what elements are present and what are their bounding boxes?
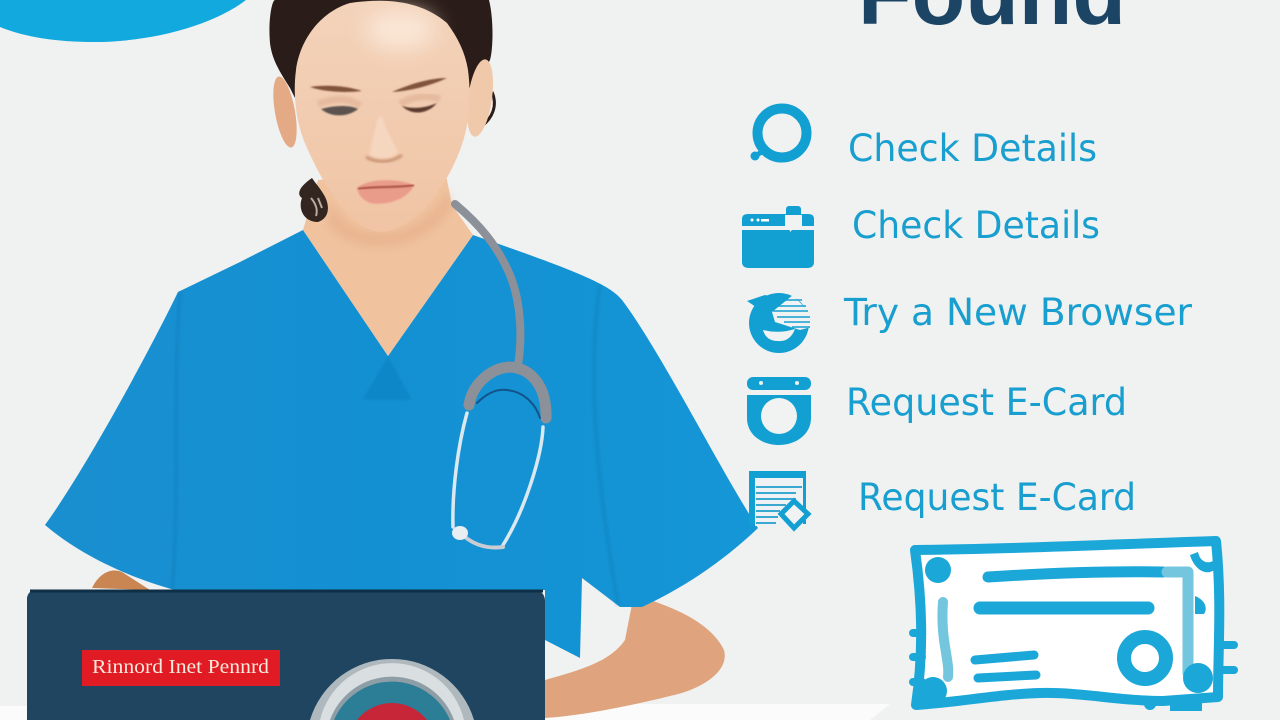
icon: card with ring <box>747 377 811 445</box>
eyelid shading <box>318 97 440 106</box>
scrubs <box>45 230 758 658</box>
item 4: request e-card: Request E-Card <box>846 381 1127 424</box>
nurse figure <box>45 0 758 718</box>
decorative cyan blob top left <box>0 0 246 42</box>
red error label: Rinnord Inet Pennrd <box>92 656 269 678</box>
laptop round logo <box>310 659 474 720</box>
e-card illustration <box>913 541 1234 711</box>
text lines <box>988 572 1163 577</box>
red error label <box>82 650 280 686</box>
icon: magnifier ring <box>750 108 806 160</box>
forehead highlight <box>365 10 435 50</box>
eyebrows <box>310 78 447 92</box>
checklist <box>742 108 1193 528</box>
hair back <box>269 0 492 100</box>
eyes <box>321 106 358 115</box>
item 5: request e-card: Request E-Card <box>858 476 1136 519</box>
card fill <box>916 542 1220 704</box>
right forearm <box>545 600 725 718</box>
pale inner frame <box>942 572 1188 677</box>
item 1: check details <box>750 108 1097 170</box>
side tabs <box>913 633 1234 682</box>
neck curl <box>299 178 328 222</box>
sleeve seams <box>172 285 618 605</box>
item 2: check details <box>742 204 1100 268</box>
tube <box>455 204 520 365</box>
item 3: try a new browser <box>747 291 1193 353</box>
face <box>295 1 470 232</box>
icon: document with tag <box>749 471 808 528</box>
item 5: request e-card <box>749 471 1136 528</box>
neck and chest <box>303 170 473 356</box>
laptop <box>27 590 545 720</box>
yoke <box>469 367 546 418</box>
nose <box>370 116 398 158</box>
item 4: request e-card <box>747 377 1127 445</box>
item 2: check details: Check Details <box>852 204 1100 247</box>
corners <box>919 552 1218 711</box>
wires <box>453 413 543 545</box>
card outline <box>915 541 1219 705</box>
seal <box>1124 637 1166 679</box>
neck shadow <box>328 190 452 247</box>
right ear hair strand <box>482 92 494 126</box>
item 3: try a new browser: Try a New Browser <box>843 291 1193 334</box>
chest piece <box>452 526 468 540</box>
table surface <box>0 704 890 720</box>
item 1: check details: Check Details <box>848 127 1097 170</box>
lips <box>357 180 414 204</box>
ears <box>269 75 301 149</box>
icon: browser window <box>742 206 814 268</box>
icon: browser globe <box>747 293 811 353</box>
inner arc <box>477 390 540 418</box>
collar fold <box>362 356 412 400</box>
left forearm <box>92 571 150 590</box>
stethoscope <box>452 204 546 548</box>
